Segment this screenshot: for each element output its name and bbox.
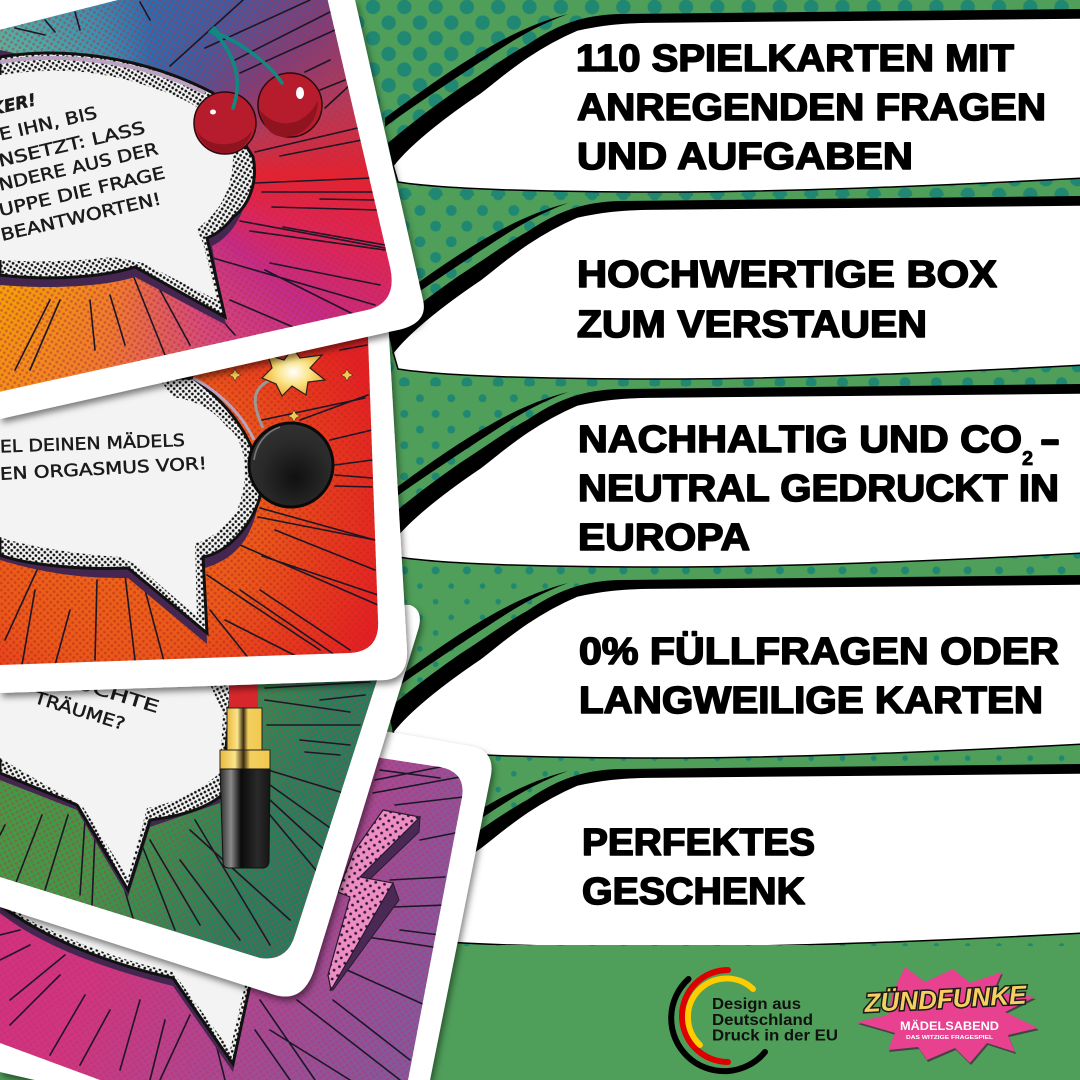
text: 110 Spielkarten: ANREGENDEN FRAGEN bbox=[577, 87, 1046, 129]
text: 0% Füllfragen bbox=[579, 630, 1059, 722]
feature banner 1 bbox=[385, 9, 1080, 192]
logo: Design aus Deutschland: Design aus bbox=[712, 996, 801, 1013]
text: nachhaltig: NACHHALTIG UND CO bbox=[578, 419, 1022, 461]
text: 110 Spielkarten bbox=[576, 38, 1046, 178]
text: 110 Spielkarten: 110 SPIELKARTEN MIT bbox=[576, 38, 1014, 80]
logo: Design aus Deutschland: Druck in der EU bbox=[712, 1028, 838, 1044]
card text: BEANTWORTEN! bbox=[0, 189, 163, 246]
icon: lightning bolt bbox=[328, 810, 420, 990]
logo: Zündfunke Mädelsabend: MÄDELSABEND bbox=[900, 1018, 999, 1033]
card text: NDERE AUS DER bbox=[0, 139, 160, 196]
logo: Zündfunke Mädelsabend bbox=[857, 967, 1039, 1065]
text: 0% Füllfragen: 0% FÜLLFRAGEN ODER bbox=[579, 630, 1059, 673]
logo: Zündfunke Mädelsabend: ZÜNDFUNKE bbox=[863, 980, 1028, 1018]
logo: Design aus Deutschland bbox=[671, 970, 838, 1071]
text: perfektes Geschenk: GESCHENK bbox=[582, 871, 806, 913]
card text: FEUCHTE bbox=[43, 664, 161, 718]
speech bubble bbox=[0, 50, 254, 325]
logo: Zündfunke Mädelsabend: DAS WITZIGE FRAGESPIEL bbox=[906, 1035, 994, 1041]
card text bbox=[1, 432, 204, 480]
icon: cherries bbox=[194, 26, 322, 154]
card 4: lightning bolt bbox=[0, 732, 498, 1080]
text: 110 Spielkarten: UND AUFGABEN bbox=[577, 136, 913, 178]
feature banner 3 bbox=[385, 384, 1080, 567]
card text bbox=[36, 689, 160, 729]
text: hochwertige Box: HOCHWERTIGE BOX bbox=[577, 254, 998, 296]
icon: lipstick bbox=[220, 680, 270, 868]
card 3: lipstick bbox=[0, 600, 420, 997]
card text: NSETZT: LASS bbox=[0, 118, 147, 172]
text: perfektes Geschenk bbox=[582, 828, 814, 906]
text: nachhaltig: NEUTRAL GEDRUCKT IN bbox=[578, 468, 1059, 510]
speech bubble bbox=[0, 907, 251, 1072]
icon: bomb with fuse and explosion bbox=[229, 348, 353, 507]
text: 0% Füllfragen: LANGWEILIGE KARTEN bbox=[579, 680, 1043, 722]
card 1: cherries bbox=[0, 0, 430, 420]
text: perfektes Geschenk: PERFEKTES bbox=[582, 822, 815, 864]
card text: UPPE DIE FRAGE bbox=[0, 163, 167, 221]
card text: EL DEINEN MÄDELS bbox=[0, 430, 185, 457]
card 2: bomb bbox=[0, 310, 407, 693]
text: nachhaltig bbox=[578, 419, 1060, 559]
text: hochwertige Box: ZUM VERSTAUEN bbox=[577, 304, 927, 346]
card text bbox=[0, 90, 167, 246]
card text: TRÄUME? bbox=[31, 687, 128, 735]
feature banner 2 bbox=[385, 196, 1080, 379]
text: hochwertige Box bbox=[577, 254, 998, 346]
card text: EN ORGASMUS VOR! bbox=[0, 454, 207, 485]
speech bubble bbox=[0, 685, 229, 897]
text: nachhaltig: 2 bbox=[1022, 448, 1033, 470]
text: nachhaltig: EUROPA bbox=[578, 517, 750, 559]
feature banner 5 bbox=[457, 764, 1080, 945]
feature banner 4 bbox=[385, 575, 1080, 758]
speech bubble bbox=[0, 378, 260, 644]
text: nachhaltig: - bbox=[1040, 419, 1060, 461]
logo: Design aus Deutschland: Deutschland bbox=[712, 1012, 813, 1029]
